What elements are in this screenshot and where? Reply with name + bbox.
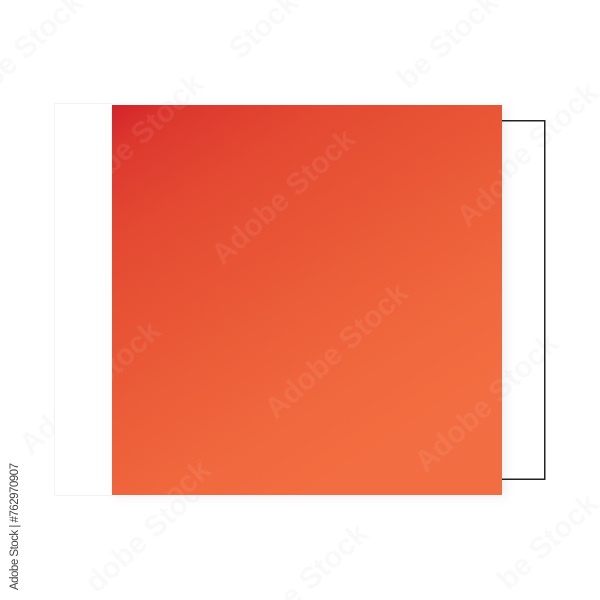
watermark on orange square: Adobe Stock (10, 314, 167, 464)
watermark on orange square: Adobe Stock (205, 122, 362, 272)
panel: left white panel (54, 104, 112, 496)
panel: orange gradient square (112, 105, 502, 495)
watermark on white background: Adobe Stock (408, 327, 565, 476)
watermark on white background: Adobe Stock (13, 312, 170, 461)
watermark on orange square (112, 105, 502, 495)
watermark on orange square: Adobe Stock (408, 329, 565, 479)
watermark on orange square: Adobe Stock (50, 71, 207, 221)
watermark on orange square: Adobe Stock (258, 276, 415, 426)
watermark on white background: Adobe Stock (53, 67, 210, 216)
watermark on orange square: Adobe Stock (60, 453, 217, 600)
panel: outlined rectangle at right (480, 121, 545, 479)
stock id label: Adobe Stock | #762970907 (9, 463, 21, 590)
watermark on white background: dobe Stock (79, 465, 220, 599)
square shadow (114, 107, 506, 497)
